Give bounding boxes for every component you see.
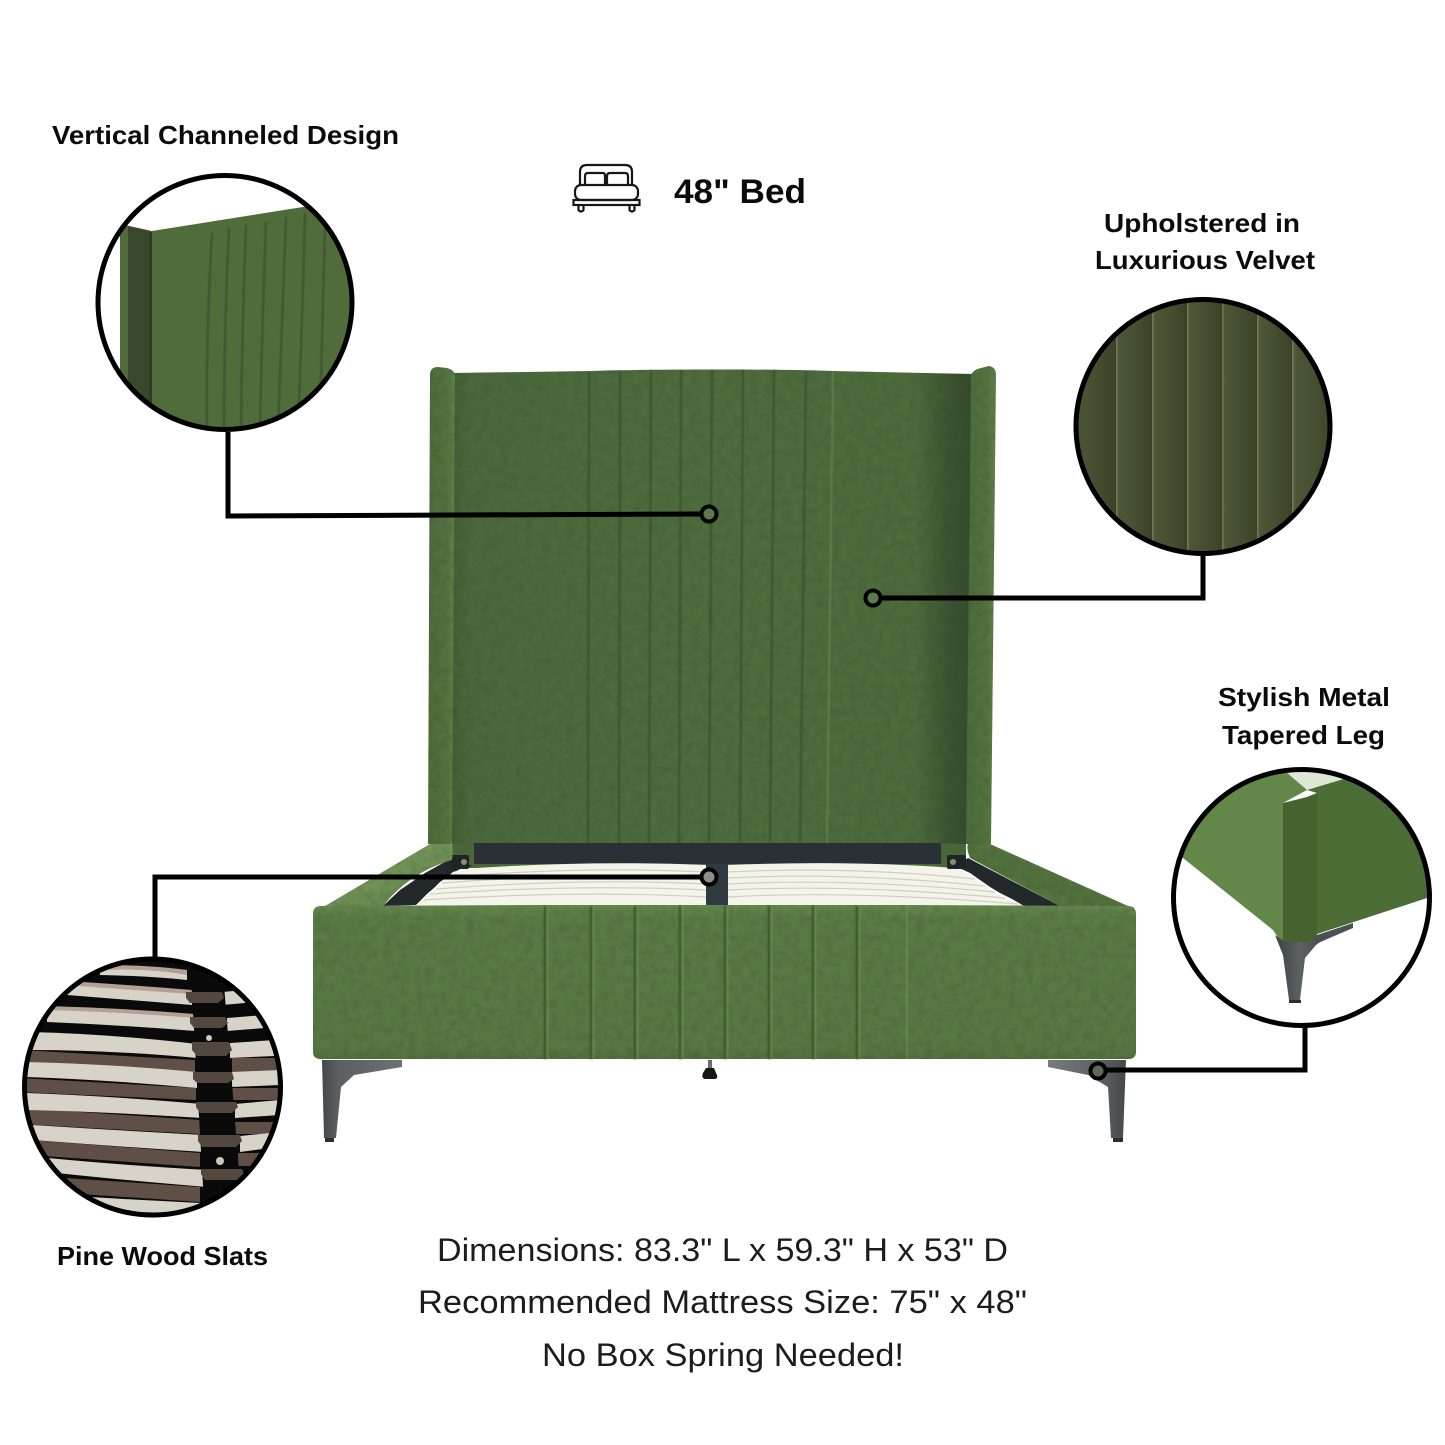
right metal leg xyxy=(1048,1060,1126,1142)
dimensions text block xyxy=(418,1232,1027,1373)
left metal leg xyxy=(322,1060,402,1142)
icon: bed xyxy=(574,165,640,212)
callout: pine wood slats xyxy=(20,870,716,1271)
bed illustration xyxy=(313,366,1136,1142)
dimensions text block: Dimensions: 83.3" L x 59.3" H x 53" D xyxy=(437,1232,1008,1268)
marker xyxy=(702,506,716,522)
right side rail xyxy=(967,844,1128,906)
centre support beam xyxy=(706,864,728,906)
right bracket xyxy=(947,855,966,869)
dimensions text block: No Box Spring Needed! xyxy=(542,1337,904,1373)
detail circle xyxy=(20,955,286,1220)
heading: Stylish Metal xyxy=(1218,682,1390,712)
leader line xyxy=(882,556,1203,598)
heading: Luxurious Velvet xyxy=(1095,245,1315,275)
centre support foot xyxy=(702,1060,717,1079)
detail circle xyxy=(1070,295,1337,560)
heading xyxy=(1095,208,1315,275)
heading: Upholstered in xyxy=(1104,208,1300,238)
heading: Vertical Channeled Design xyxy=(52,120,399,150)
right inner rail with teeth xyxy=(955,858,1060,906)
leader line xyxy=(155,877,701,957)
detail circle xyxy=(98,176,360,440)
title text: 48" Bed xyxy=(674,173,806,211)
callout: vertical channeled design xyxy=(52,120,716,522)
leader line xyxy=(1107,1027,1305,1070)
right wing xyxy=(966,366,996,844)
back support strip xyxy=(474,843,941,864)
heading: Pine Wood Slats xyxy=(57,1241,268,1271)
leader line xyxy=(228,432,701,516)
dimensions text block: Recommended Mattress Size: 75" x 48" xyxy=(418,1284,1027,1320)
title with bed icon xyxy=(574,165,806,212)
heading xyxy=(1218,682,1390,750)
headboard panel xyxy=(450,370,973,844)
left inner rail with teeth xyxy=(383,858,472,906)
headboard lower section behind the slats xyxy=(452,840,966,868)
mattress slats xyxy=(418,863,1024,906)
marker xyxy=(702,870,716,884)
heading: Tapered Leg xyxy=(1222,720,1385,750)
detail circle xyxy=(1160,760,1440,1026)
front frame panel xyxy=(313,905,1136,1059)
left side rail xyxy=(325,844,453,906)
callout: stylish metal tapered leg xyxy=(1090,682,1440,1078)
marker xyxy=(1090,1064,1106,1078)
left bracket xyxy=(450,855,469,869)
left wing xyxy=(428,367,455,844)
marker xyxy=(866,590,880,606)
callout: upholstered in luxurious velvet xyxy=(866,208,1337,606)
